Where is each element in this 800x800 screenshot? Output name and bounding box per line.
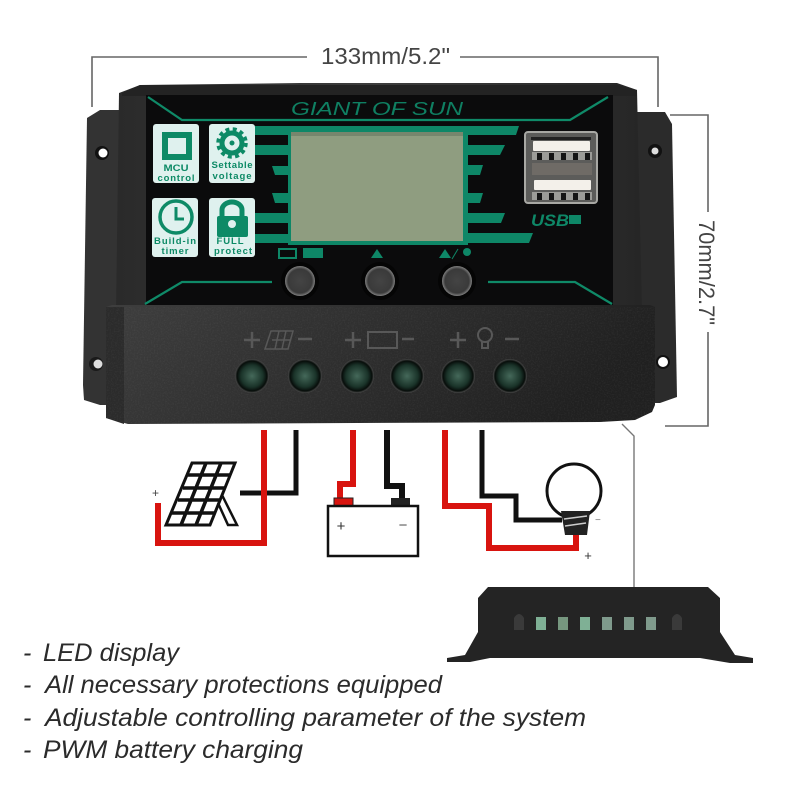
terminal cover (106, 305, 655, 424)
wiring: load bulb: + (584, 548, 592, 563)
feature list: Adjustable controlling parameter of the system (43, 704, 586, 732)
housing body (116, 83, 642, 310)
feature 1: - (23, 639, 31, 667)
badge: MCU control: MCU (164, 163, 189, 174)
badge: build-in timer: Build-in (154, 236, 196, 247)
light bulb icon (547, 464, 601, 535)
battery icon: − (399, 517, 408, 534)
wiring: solar panel: + (152, 486, 159, 500)
mounting holes (89, 144, 670, 371)
vents (514, 614, 682, 630)
feature list: All necessary protections equipped (43, 671, 443, 699)
controller: bottom view (447, 587, 753, 663)
badge: full protect (209, 198, 255, 257)
badge: full protect: FULL (216, 236, 244, 247)
feature 4: - (23, 736, 31, 764)
left green stripes (255, 126, 290, 243)
badge: build-in timer: timer (162, 246, 189, 257)
badge: MCU control: control (158, 173, 194, 184)
black front panel (146, 95, 613, 307)
wiring: battery (328, 430, 418, 556)
feature list: PWM battery charging (43, 736, 303, 764)
USB label: USB (531, 211, 569, 230)
badge: full protect: protect (214, 246, 253, 257)
left mounting flange (83, 110, 122, 405)
controller: front view (83, 83, 677, 425)
right green stripes (465, 126, 533, 243)
feature 2: - (23, 671, 31, 699)
dimension: width 133mm/5.2in (92, 43, 658, 107)
badge: MCU control (153, 124, 199, 184)
wiring: load bulb (445, 430, 601, 563)
feature list (23, 639, 586, 764)
terminal screws (235, 359, 527, 393)
leader line to bottom view (622, 424, 634, 590)
dimension: height 70mm/2.7in (665, 115, 719, 426)
battery icon: + (337, 518, 346, 535)
wiring: load bulb: − (595, 515, 601, 526)
terminal symbols (244, 328, 519, 349)
feature 3: - (23, 704, 31, 732)
dimension: height 70mm/2.7in: 70mm/2.7" (694, 220, 719, 325)
feature list: LED display (43, 639, 181, 667)
solar panel icon (166, 463, 237, 525)
badge: settable voltage: voltage (212, 171, 252, 182)
LCD screen (288, 126, 468, 245)
badge: build-in timer (152, 198, 198, 257)
right mounting flange (636, 112, 677, 403)
control buttons (281, 262, 476, 300)
brand title: GIANT OF SUN (291, 99, 464, 119)
dual USB port (525, 132, 597, 203)
battery icon (328, 498, 418, 556)
wiring: solar panel (152, 430, 296, 543)
button mode icons (279, 248, 471, 259)
badge: settable voltage (209, 124, 255, 183)
dimension: width 133mm/5.2in: 133mm/5.2" (321, 43, 450, 69)
badge: settable voltage: Settable (212, 160, 252, 171)
green frame lines (145, 97, 612, 304)
